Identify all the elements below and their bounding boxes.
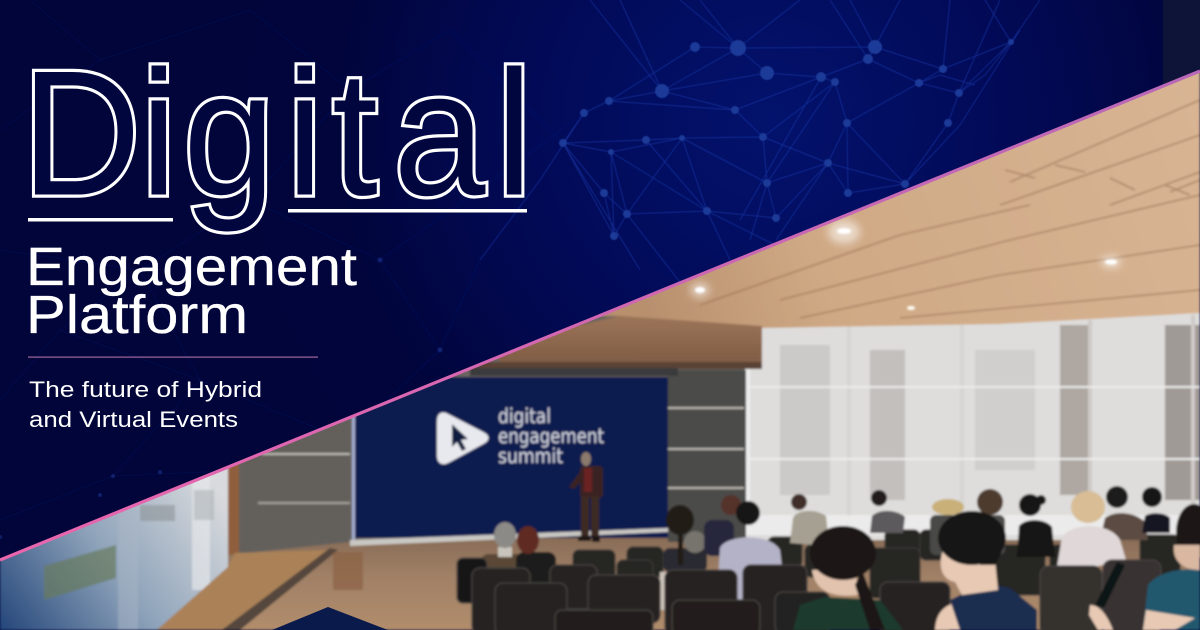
network pattern: [0, 0, 1040, 539]
ceiling: [600, 60, 1200, 328]
title underline right: [288, 209, 527, 212]
screen: [350, 368, 678, 546]
speaker: [569, 452, 603, 542]
screen logo text: digital: [498, 404, 551, 428]
heading: Engagement Platform: Platform: [26, 285, 248, 345]
heading: Engagement Platform: Engagement: [26, 237, 357, 297]
subtitle: and Virtual Events: [29, 407, 238, 432]
screen logo: [438, 413, 488, 463]
title underline left: [28, 218, 173, 222]
audience: back row: [790, 486, 1170, 557]
faint left network: [0, 0, 584, 520]
subtitle: [29, 377, 262, 432]
bottom navy arrow tab: [272, 607, 388, 630]
floor: [228, 536, 1190, 630]
front woman with back hair: [793, 526, 903, 630]
windows: [745, 305, 1200, 540]
audience: centre pair: [660, 495, 782, 610]
right woman with phone: [1089, 504, 1200, 630]
diagonal pink edge: [0, 71, 1200, 560]
left concrete wall: [257, 452, 351, 505]
divider line: [28, 356, 318, 358]
chairs back rows: [573, 530, 1180, 598]
screen logo text: [498, 404, 604, 468]
subtitle: The future of Hybrid: [29, 377, 262, 402]
base fill: [354, 312, 746, 542]
right dark wall: [668, 370, 746, 542]
right edge strip: [1163, 0, 1200, 90]
screen logo text: engagement: [498, 424, 604, 448]
chairs front rows: [457, 558, 1161, 630]
audience: blond man: [1057, 491, 1126, 570]
title: Digital outlined: Digital: [21, 34, 532, 233]
wood fascia: [490, 316, 762, 368]
audience: left group: [480, 522, 556, 590]
screen logo text: summit: [498, 444, 563, 468]
ceiling lights: [690, 220, 1121, 310]
left window wall: [0, 468, 230, 630]
heading: Engagement Platform: [26, 237, 357, 345]
front woman with short hair: [935, 511, 1037, 630]
wooden column: [228, 460, 239, 560]
